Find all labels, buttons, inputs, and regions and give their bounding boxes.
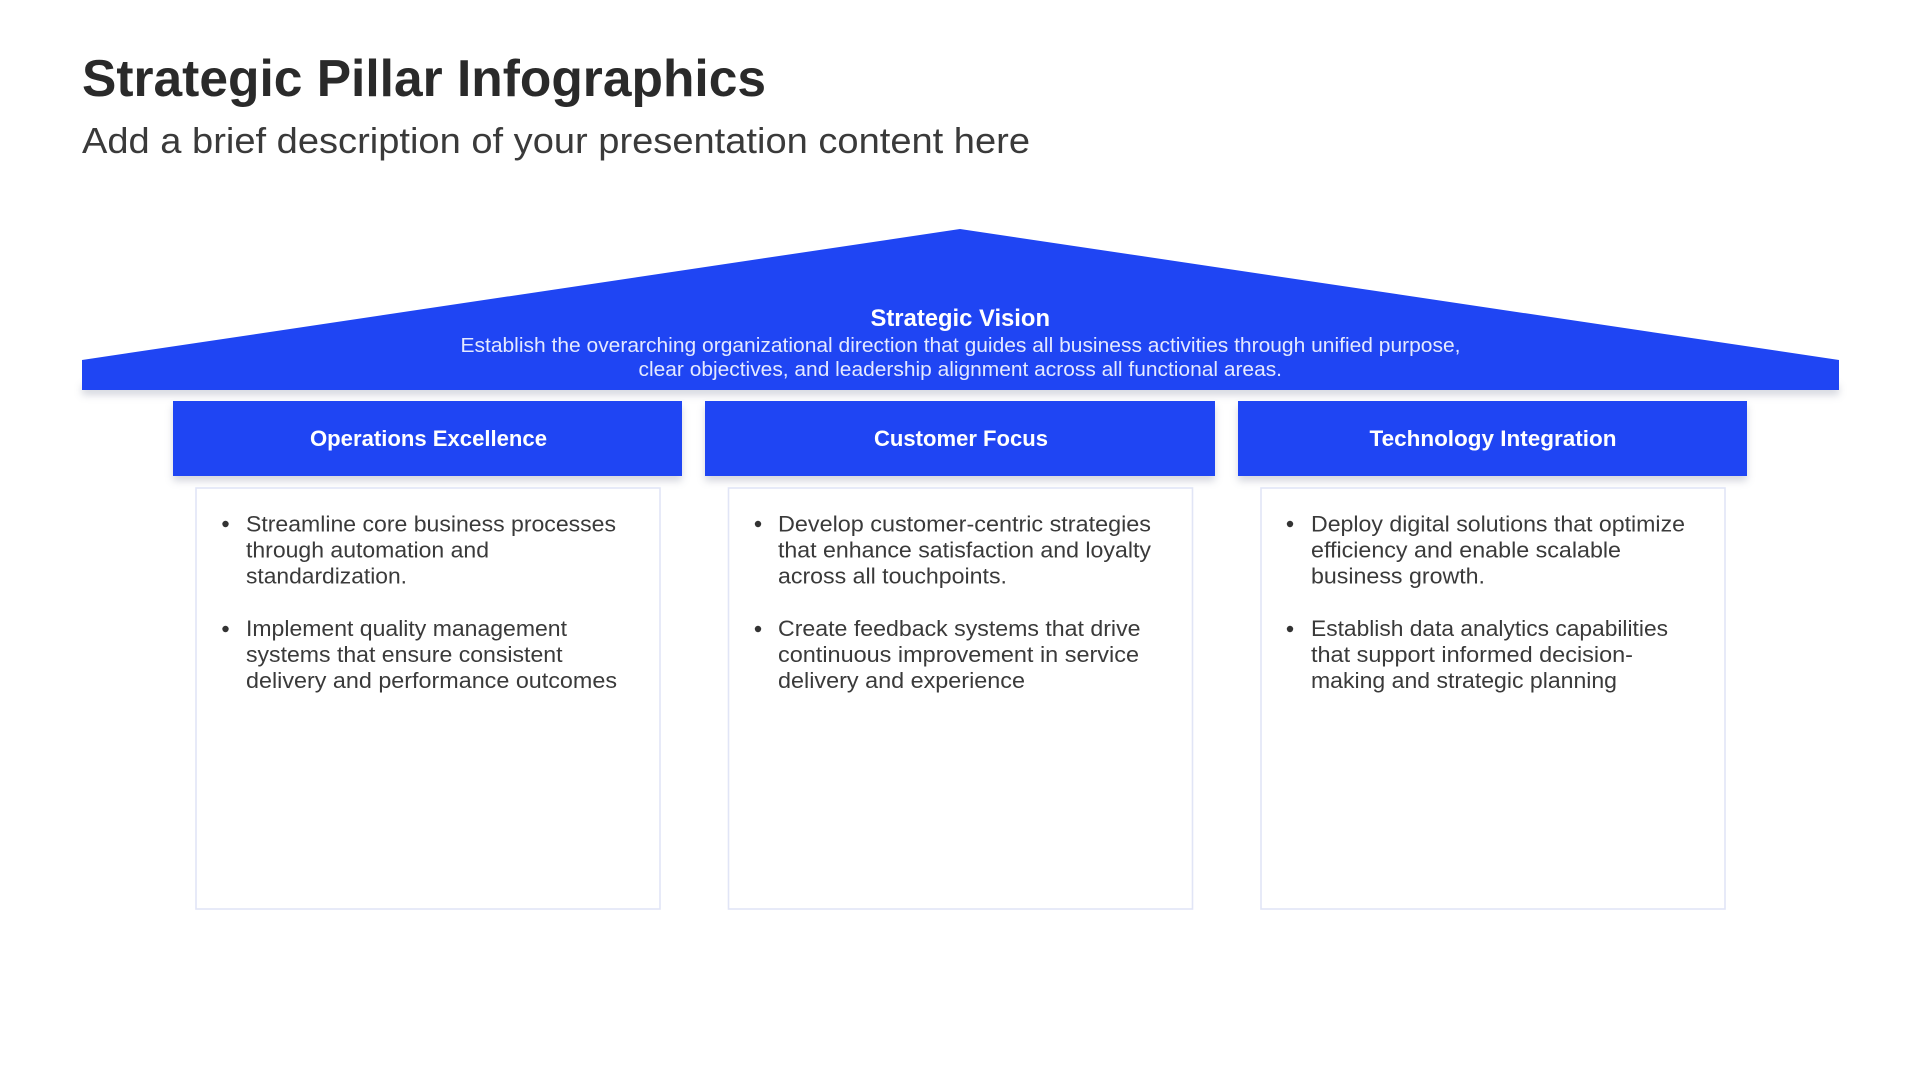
bullet list: across all touchpoints. — [778, 564, 1007, 588]
vision description — [460, 334, 1460, 381]
vision heading: Strategic Vision — [870, 305, 1050, 332]
bullet list: making and strategic planning — [1311, 668, 1617, 693]
bullet list: that enhance satisfaction and loyalty — [778, 538, 1152, 562]
bullet list: through automation and — [246, 538, 489, 562]
panel: operations excellence pillar — [173, 401, 682, 909]
bullet list: systems that ensure consistent — [246, 642, 563, 667]
bullet list: Streamline core business processes — [246, 512, 616, 536]
bullet list: delivery and experience — [778, 668, 1025, 693]
bullet list: business growth. — [1311, 564, 1485, 588]
bullet list: continuous improvement in service — [778, 642, 1139, 667]
bullet list — [222, 512, 617, 693]
bullet list: Implement quality management — [246, 616, 568, 641]
pillar header — [173, 401, 682, 476]
bullet list: delivery and performance outcomes — [246, 668, 617, 693]
title: Strategic Pillar Infographics — [82, 50, 766, 108]
bullet list — [1287, 512, 1685, 693]
bullet list: that support informed decision- — [1311, 642, 1633, 667]
bullet list: standardization. — [246, 564, 407, 588]
panel: technology integration pillar — [1238, 401, 1747, 909]
content box — [728, 488, 1192, 909]
pillar heading: Technology Integration — [1370, 426, 1616, 451]
bullet list: Deploy digital solutions that optimize — [1311, 512, 1685, 536]
bullet list: Establish data analytics capabilities — [1311, 616, 1668, 641]
bullet list: Create feedback systems that drive — [778, 616, 1140, 641]
bullet list: efficiency and enable scalable — [1311, 538, 1621, 562]
vision description: Establish the overarching organizational direction that guides all business activities through unified purpose, — [460, 334, 1460, 357]
subtitle: Add a brief description of your presentation content here — [82, 120, 1030, 161]
pillar heading: Operations Excellence — [310, 426, 547, 451]
pillar header — [1238, 401, 1747, 476]
pillar header — [705, 401, 1215, 476]
content box — [1261, 488, 1725, 909]
bullet list — [755, 512, 1152, 693]
pillar heading: Customer Focus — [874, 426, 1048, 451]
roof shadow — [82, 380, 1839, 390]
content box — [196, 488, 660, 909]
vision description: clear objectives, and leadership alignment across all functional areas. — [638, 358, 1282, 381]
panel: customer focus pillar — [705, 401, 1215, 909]
roof shape — [82, 229, 1839, 390]
bullet list: Develop customer-centric strategies — [778, 512, 1151, 536]
panel: strategic vision roof — [82, 229, 1839, 390]
